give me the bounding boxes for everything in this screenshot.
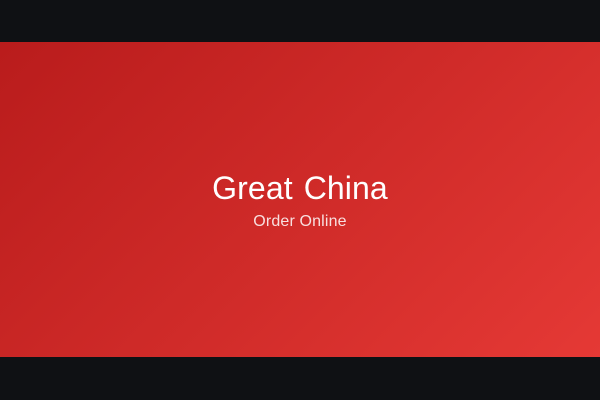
panel: red gradient banner bbox=[0, 42, 600, 357]
title: Great China bbox=[212, 170, 388, 206]
subtitle: Order Online bbox=[253, 213, 347, 230]
